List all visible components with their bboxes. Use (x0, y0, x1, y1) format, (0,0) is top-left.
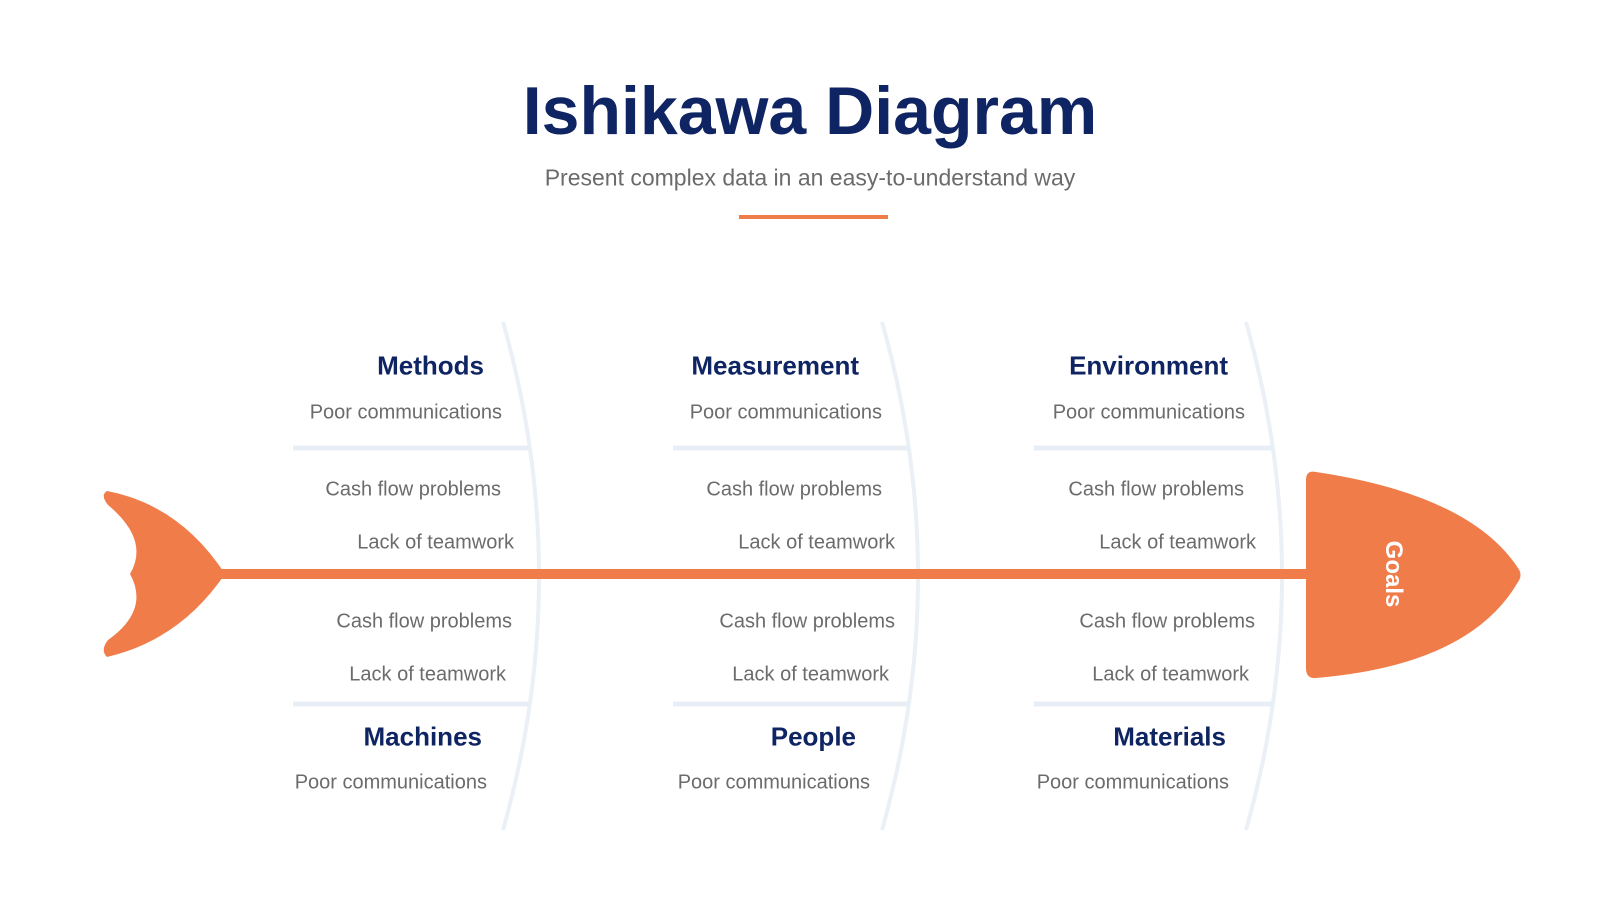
spine (215, 569, 1315, 579)
items col 2 (678, 402, 895, 794)
text: Lack of teamwork (738, 532, 895, 554)
text: Cash flow problems (719, 610, 895, 632)
title: Ishikawa Diagram (523, 73, 1097, 149)
upper items col 1 (295, 402, 514, 794)
text: Poor communications (310, 402, 502, 424)
category: Materials: Materials (1113, 722, 1226, 752)
text: Cash flow problems (325, 478, 501, 500)
subtitle: Present complex data in an easy-to-understand way (545, 164, 1075, 190)
head: Goals (1380, 541, 1407, 607)
text: Lack of teamwork (1092, 664, 1249, 686)
tail (104, 491, 225, 657)
text: Lack of teamwork (732, 664, 889, 686)
category: Methods: Methods (377, 350, 484, 380)
category: Environment: Environment (1069, 350, 1228, 380)
text: Lack of teamwork (357, 532, 514, 554)
category: People: People (771, 722, 856, 752)
text: Poor communications (690, 402, 882, 424)
text: Lack of teamwork (349, 664, 506, 686)
category: Measurement: Measurement (691, 350, 859, 380)
text: Cash flow problems (706, 478, 882, 500)
category: Machines: Machines (364, 722, 482, 752)
text: Poor communications (1037, 772, 1229, 794)
text: Poor communications (678, 772, 870, 794)
text: Lack of teamwork (1099, 532, 1256, 554)
head (1306, 472, 1520, 678)
text: Poor communications (1053, 402, 1245, 424)
text: Cash flow problems (1068, 478, 1244, 500)
text: Poor communications (295, 772, 487, 794)
accent underline (739, 215, 888, 219)
items col 3 (1037, 402, 1256, 794)
text: Cash flow problems (1079, 610, 1255, 632)
text: Cash flow problems (336, 610, 512, 632)
